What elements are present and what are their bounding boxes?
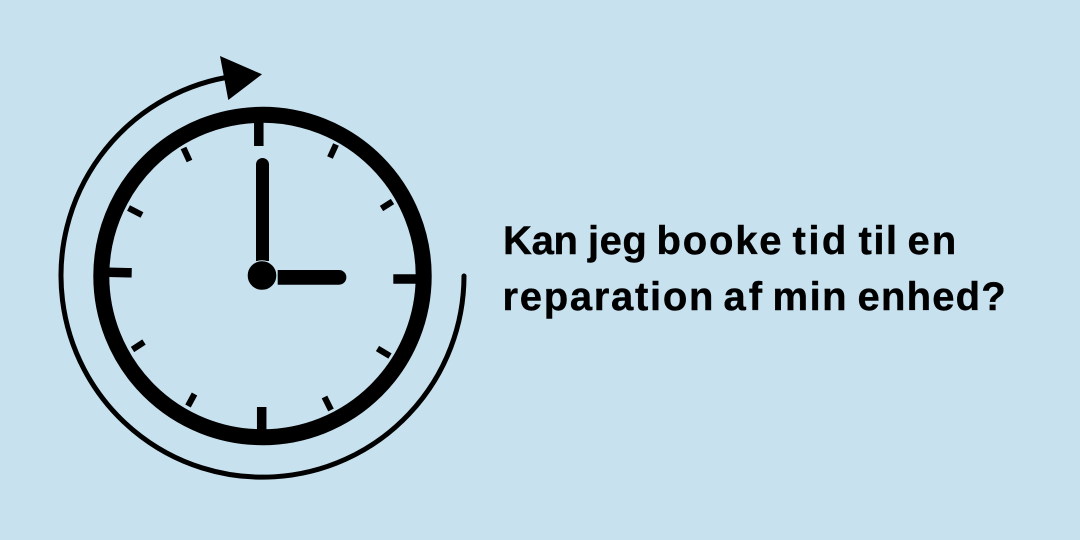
arrow head	[220, 56, 262, 100]
clock ring	[101, 115, 424, 437]
question text: tid	[792, 219, 849, 263]
question text: Kan	[503, 219, 578, 263]
question text: reparation	[502, 275, 715, 319]
question text: til	[858, 219, 899, 263]
question text: jeg	[588, 219, 647, 263]
question text: af	[724, 275, 765, 319]
question text	[502, 219, 1007, 319]
icon: clock with circular arrow	[58, 56, 466, 480]
question text: min	[772, 275, 848, 319]
clock hands	[256, 158, 346, 285]
question text: en	[908, 219, 958, 263]
circular arrow stroke	[61, 78, 464, 477]
clock centre	[247, 261, 277, 290]
question text: enhed?	[858, 275, 1007, 319]
hour ticks	[108, 120, 418, 432]
question text: booke	[656, 219, 783, 263]
